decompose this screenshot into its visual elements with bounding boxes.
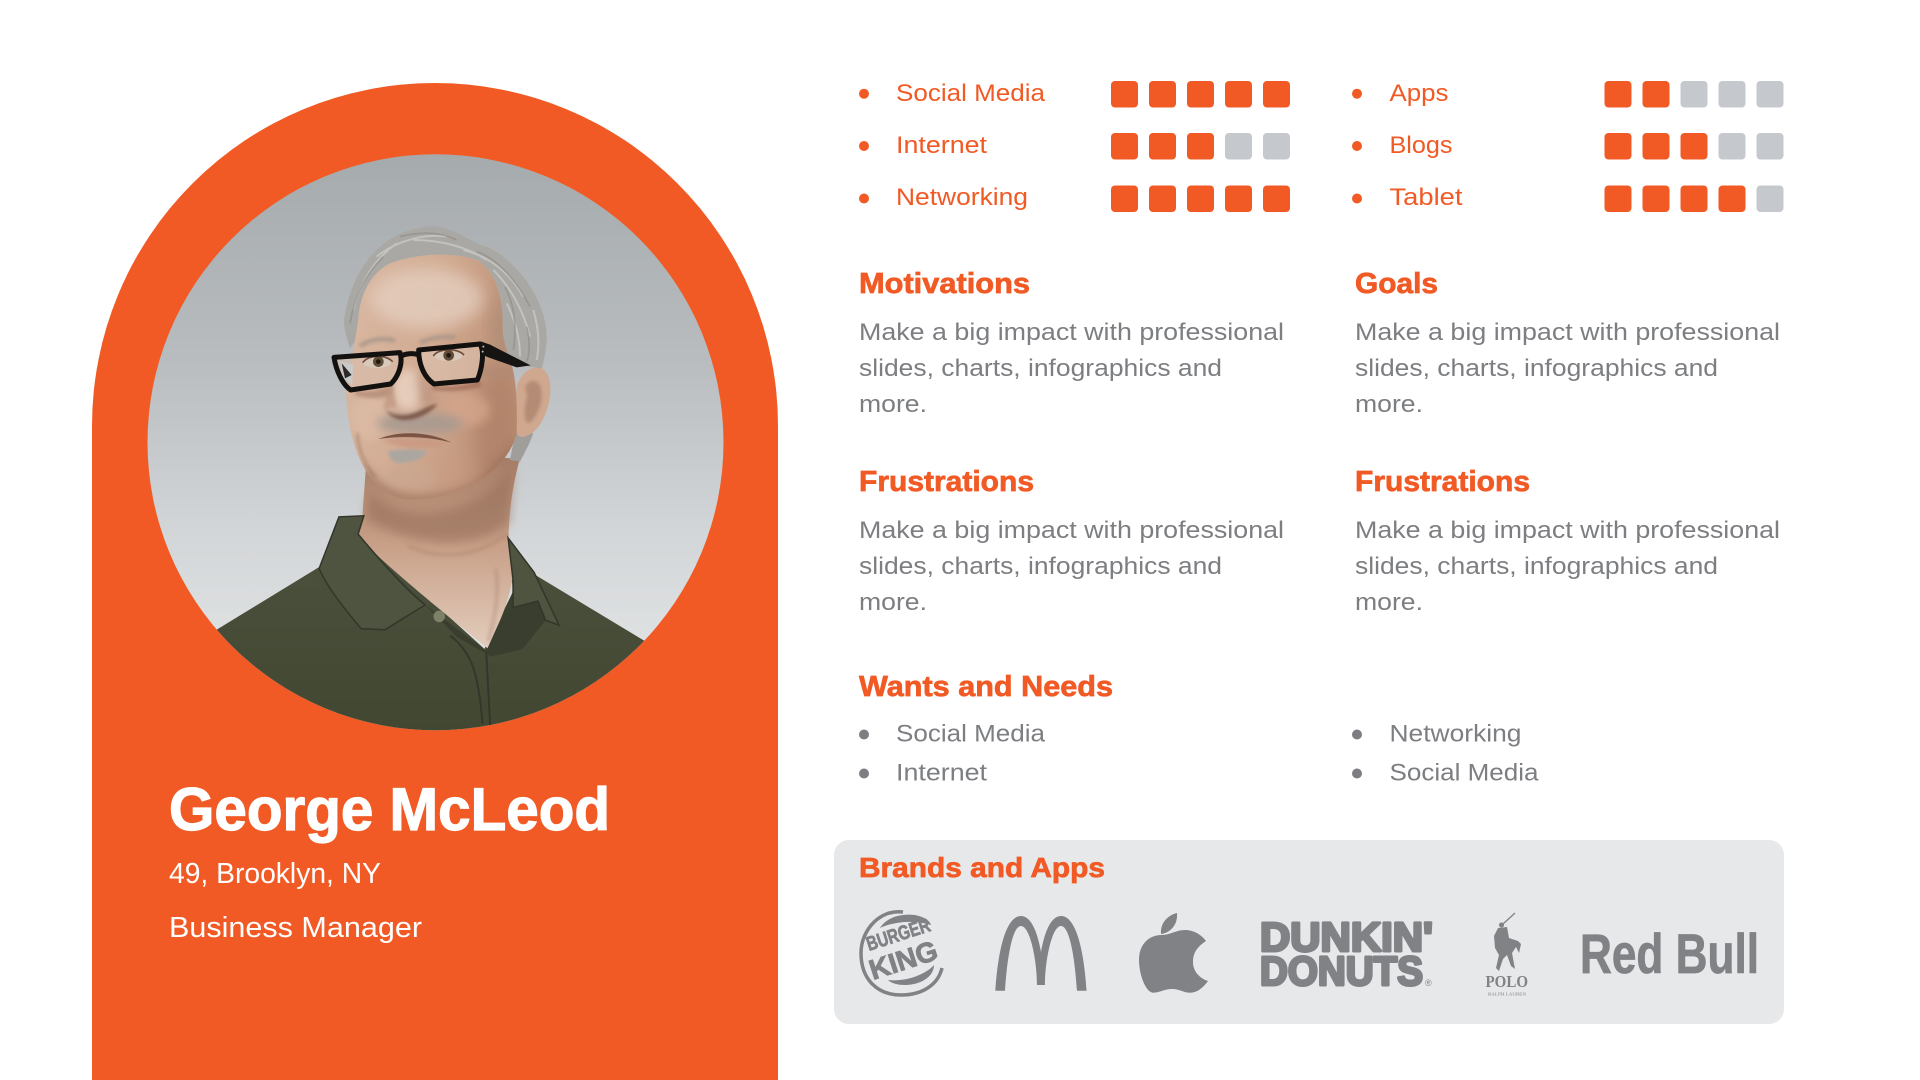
section: Frustrations right: Frustrations bbox=[1355, 466, 1530, 498]
section: Goals: slides, charts, infographics and bbox=[1355, 355, 1718, 382]
section: Motivations bbox=[859, 268, 1284, 418]
section: Frustrations right: Make a big impact with professional bbox=[1355, 517, 1780, 544]
section: Motivations: slides, charts, infographics and bbox=[859, 355, 1222, 382]
section: Frustrations left: more. bbox=[859, 589, 927, 616]
job title: Business Manager bbox=[169, 912, 422, 944]
logo: Burger King: BURGER bbox=[864, 914, 934, 956]
section: Frustrations right bbox=[1355, 466, 1780, 616]
section: Frustrations left: slides, charts, infographics and bbox=[859, 553, 1222, 580]
section: Wants and Needs: Networking bbox=[1390, 720, 1522, 748]
section: Goals: Goals bbox=[1355, 268, 1438, 300]
rating: Apps bbox=[1352, 80, 1784, 108]
rating: Blogs: Blogs bbox=[1390, 132, 1452, 159]
section: Wants and Needs bbox=[859, 671, 1539, 786]
rating: Blogs bbox=[1352, 132, 1784, 160]
age and location: 49, Brooklyn, NY bbox=[169, 858, 381, 890]
brands heading: Brands and Apps bbox=[859, 852, 1105, 883]
rating: Networking bbox=[859, 184, 1290, 212]
section: Wants and Needs: Internet bbox=[896, 760, 987, 786]
section: Motivations: Motivations bbox=[859, 268, 1030, 300]
section: Goals: more. bbox=[1355, 391, 1423, 418]
section: Motivations: more. bbox=[859, 391, 927, 418]
skills ratings left column bbox=[859, 80, 1290, 212]
section: Motivations: Make a big impact with professional bbox=[859, 319, 1284, 346]
portrait photo of George McLeod bbox=[140, 151, 740, 752]
rating: Tablet: Tablet bbox=[1390, 184, 1463, 211]
section: Frustrations right: more. bbox=[1355, 589, 1423, 616]
section: Frustrations left bbox=[859, 466, 1284, 616]
rating: Internet bbox=[859, 132, 1290, 160]
logo: Red Bull: Red Bull bbox=[1580, 922, 1759, 985]
rating: Tablet bbox=[1352, 184, 1784, 212]
section: Goals bbox=[1355, 268, 1780, 418]
logo: Polo Ralph Lauren: POLO bbox=[1486, 972, 1528, 991]
logo: McDonald's arches bbox=[995, 916, 1087, 991]
logo: Dunkin' Donuts bbox=[1260, 914, 1433, 994]
section: Wants and Needs: Wants and Needs bbox=[859, 671, 1113, 703]
rating: Social Media bbox=[859, 80, 1290, 108]
logo: Burger King: KING bbox=[865, 935, 941, 986]
logo: Burger King bbox=[861, 912, 942, 995]
rating: Apps: Apps bbox=[1390, 80, 1448, 107]
orange arch panel bbox=[92, 83, 778, 1080]
rating: Internet: Internet bbox=[896, 132, 987, 159]
logo: Dunkin' Donuts: DONUTS bbox=[1260, 948, 1423, 994]
panel: Brands and Apps bbox=[834, 840, 1784, 1024]
name: George McLeod: George McLeod bbox=[169, 776, 610, 843]
section: Frustrations left: Frustrations bbox=[859, 466, 1034, 498]
section: Wants and Needs: Social Media bbox=[1390, 760, 1539, 786]
skills ratings right column bbox=[1352, 80, 1784, 212]
section: Wants and Needs: Social Media bbox=[896, 720, 1045, 748]
logo: Polo Ralph Lauren bbox=[1486, 913, 1528, 996]
logo: Polo Ralph Lauren: RALPH LAUREN bbox=[1488, 992, 1527, 996]
section: Goals: Make a big impact with professional bbox=[1355, 319, 1780, 346]
logo: Dunkin' Donuts: DUNKIN' bbox=[1260, 914, 1433, 960]
logo: Apple bbox=[1139, 913, 1208, 993]
section: Frustrations right: slides, charts, infographics and bbox=[1355, 553, 1718, 580]
logo: Dunkin' Donuts: ® bbox=[1425, 978, 1432, 988]
rating: Social Media: Social Media bbox=[896, 80, 1045, 107]
rating: Networking: Networking bbox=[896, 184, 1028, 211]
section: Frustrations left: Make a big impact with professional bbox=[859, 517, 1284, 544]
